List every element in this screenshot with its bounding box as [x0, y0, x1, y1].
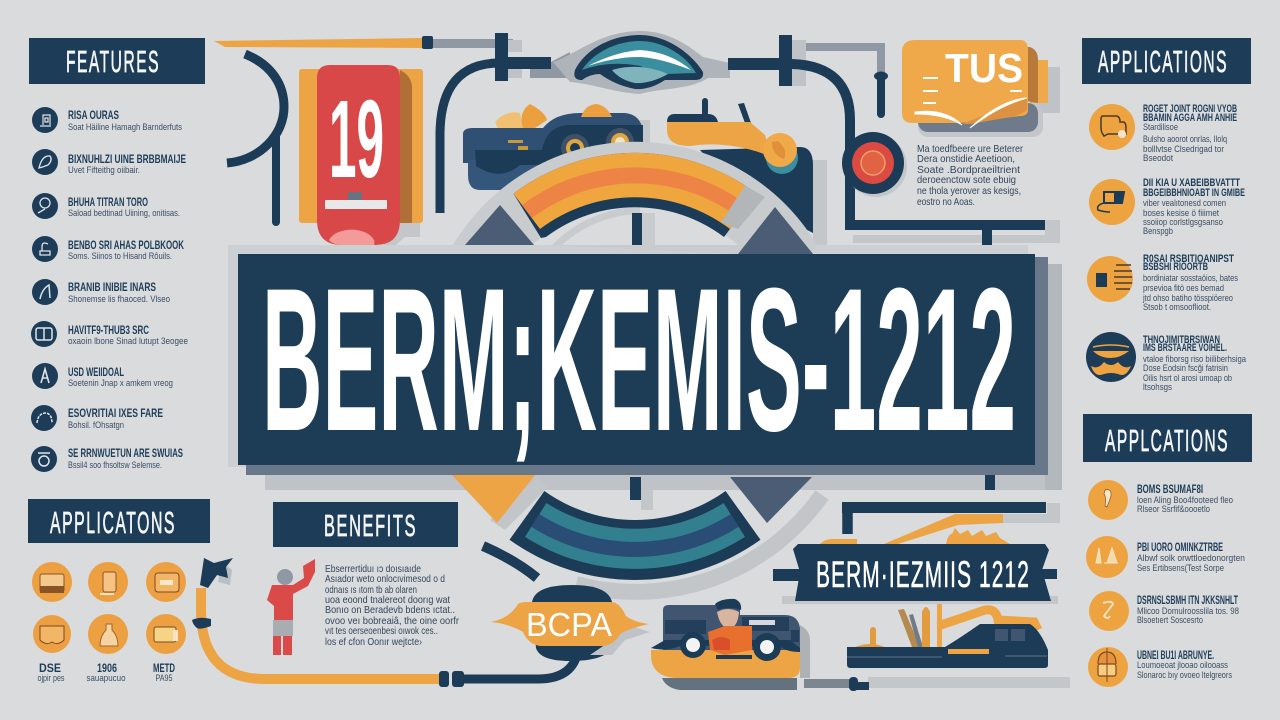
TUS sign [902, 40, 1060, 137]
label: METD [153, 661, 175, 684]
application item 4: Oilis hsrt ol arosi umoap ob [1143, 373, 1232, 384]
heading: applicatons [28, 499, 210, 543]
panel: features [29, 38, 205, 472]
feature item 3: Saload bedtinad Uiining, onitisas. [68, 208, 180, 219]
label: DSE [38, 661, 65, 684]
heading: benefits: BENEFITS [324, 508, 417, 543]
application item 4: ltsohsgs [1143, 382, 1172, 393]
application item 1: bolllvtse Clsedrigad tor [1143, 144, 1224, 155]
application item 4: THNOJIMITBRSIWAN [1143, 334, 1220, 346]
application item 2: viber vealıtonesd comen [1143, 198, 1226, 209]
feature item 7: Soetenin Jnap x amkem vreog [68, 378, 173, 389]
feature item 1: Soat Häiline Hamagh Barnderfuts [68, 122, 182, 133]
application item 3: jtd ohso batiho tösspiöereo [1142, 293, 1233, 304]
panel: applications bottom left [28, 499, 210, 684]
application item 3: BSBSHI RIOORTB [1143, 261, 1208, 273]
TUS sign: TUS [945, 45, 1023, 91]
text block: benefits: uoa eoond tnalereot doorıg wat [325, 594, 450, 606]
dark vehicle with orange cargo [463, 104, 650, 190]
text block: benefits: ovoo veı bobreaiâ, the oine oorfr [325, 615, 459, 627]
application detail 1: loen Aling Boo4footeed fleo [1137, 495, 1233, 506]
feature item 9: Bssil4 soo fhsoltsw Selemse. [68, 460, 162, 471]
application item 2 [1089, 177, 1245, 237]
application detail 4: Loumoeoat jlooao oilooass [1137, 660, 1228, 671]
icon: orange circle 6 [146, 614, 186, 654]
application detail 2: Albwf solk orwttloedonorgten [1137, 553, 1245, 564]
application item 3 [1087, 253, 1238, 313]
feature item 4: BENBO SRI AHAS POLBKOOK [68, 238, 184, 252]
feature item 5: BRANIB INIBIE INARS [68, 280, 156, 294]
application item 2: ssoiiop corlstlgsgsanso [1143, 217, 1223, 228]
feature item 7: USD WEIIDOAL [68, 365, 124, 379]
application detail 3: Mlicoo Domulroosslila tos. 98 [1137, 606, 1239, 617]
application item 3: R0SAI RSBITIOANIPST [1143, 253, 1234, 265]
TUS text block: Soate .Bordpraeiltrient [917, 164, 1020, 176]
application detail 4 [1088, 647, 1232, 687]
ribbon banner: BERM·IEZMIIS 1212 [816, 554, 1030, 595]
icon: orange circle 1 [32, 562, 72, 602]
application item 3: prsevioa fitö oes bemad [1143, 283, 1224, 294]
icon: person raising arm [267, 559, 315, 655]
text block: benefits: odnaıs ıs ıtom tb ab olaren [325, 584, 417, 596]
excavator and car [820, 502, 1060, 668]
heading: features [29, 38, 205, 84]
feature item 6 [31, 321, 188, 347]
ribbon banner [773, 544, 1058, 604]
feature item 8 [31, 405, 163, 431]
application detail 1: BOMS BSUMAF8I [1137, 482, 1203, 496]
text block: benefits: Asıador weto onlocıvimesod o d [325, 573, 445, 585]
heading: benefits [273, 502, 458, 547]
feature item 6: oxaoin lbone Sinad lutupt 3eogee [68, 336, 188, 347]
application item 1: Bulsho aoorot onrlas, Ilolq [1143, 134, 1227, 145]
feature item 8: Bohsil. fOhsatgn [68, 420, 124, 431]
heading: features: FEATURES [66, 44, 160, 79]
text block: benefits: vıt tes oerseoenbesi oıwok ces.. [325, 625, 438, 637]
label: 1906 [86, 661, 126, 684]
application detail 3 [1089, 591, 1239, 631]
application item 1 [1089, 103, 1237, 164]
text block: benefits: Ebserrertiduı ıɔ doısıaıde [325, 563, 421, 575]
application item 1: Stardilisoe [1143, 122, 1178, 133]
banner backing strip [228, 245, 1028, 467]
feature item 4: Soms. Siinos to Hisand Rôuils. [68, 251, 172, 262]
orange bus with person [651, 599, 810, 690]
eye emblem [553, 31, 730, 94]
label: METD: METD [153, 661, 175, 675]
application item 4: vtaloe fiborsg riso biiliberhsiga [1143, 354, 1247, 365]
lower arch with teal bands [452, 475, 995, 592]
panel: benefits [267, 502, 459, 655]
feature item 2: BIXNUHLZI UINE BRBBMAIJE [68, 152, 186, 166]
BCPA badge and dark connector [460, 585, 650, 679]
heading: applcations [1083, 414, 1252, 462]
application detail 1: Rlseor Ssrfif&oooetlo [1137, 504, 1210, 515]
feature item 3 [32, 193, 180, 219]
icon: orange circle 5 [88, 614, 128, 654]
top right pipe with red wheel [728, 35, 1060, 245]
label: 1906: 1906 [97, 661, 117, 675]
application item 2: boses kesise ö fiiimet [1143, 208, 1219, 219]
application item 4 [1086, 332, 1247, 393]
red number card: 19 [329, 78, 384, 201]
red number card [299, 65, 423, 250]
application detail 2: Ses Ertibsens(Test Sorpe [1137, 563, 1224, 574]
upper arch with orange bands [453, 142, 817, 254]
heading: applicatons: APPLICATONS [50, 505, 176, 540]
top left pipe: orange taper, gray link and cross [214, 33, 570, 213]
application detail 2 [1086, 536, 1245, 578]
icon: orange circle 2 [88, 562, 128, 602]
TUS text block: ne thola yerover as kesigs, [917, 185, 1021, 197]
application detail 2: PBI UORO OMINKZTRBE [1137, 540, 1223, 554]
text block: benefits [325, 563, 459, 648]
application detail 4: UBNEI BU1I ABRUNYE. [1137, 648, 1214, 662]
label: DSE: ojpir pes [38, 673, 65, 684]
label: METD: PA95 [156, 673, 172, 684]
icon: orange circle 4 [33, 615, 71, 653]
label: 1906: sauapucuo [86, 673, 126, 684]
application detail 4: Slonaroc bıy ovoeo ltelgreors [1137, 670, 1232, 681]
feature item 1: RISA OURAS [68, 108, 119, 122]
application item 4: Dose Eodsin fscği fatrisin [1143, 363, 1228, 374]
text block: benefits: Bonıo on Beradevb bdens ıctat.. [325, 604, 455, 616]
left curved line [227, 54, 284, 222]
heading: applications [1082, 38, 1251, 84]
panel: applications lower right [1083, 414, 1252, 687]
TUS text block [917, 143, 1023, 208]
label: DSE: DSE [39, 661, 61, 675]
orange machine behind arch [667, 98, 827, 245]
person in bus [708, 599, 752, 659]
application item 1: Bseodot [1143, 153, 1173, 164]
text block: benefits: los ef cfon Oonır wejtcte› [325, 636, 422, 648]
TUS text block: eostro no Aoas. [917, 196, 975, 208]
arrow: orange curved path with star head [192, 558, 464, 687]
feature item 5 [32, 279, 170, 305]
feature item 8: ESOVRITIAI IXES FARE [68, 406, 163, 420]
application item 2: Benspgb [1143, 226, 1173, 237]
feature item 2: Uvet Fifteithg oiibair. [68, 165, 140, 176]
feature item 2 [32, 149, 186, 176]
feature item 6: HAVITF9-THUB3 SRC [68, 323, 149, 337]
feature item 7 [32, 363, 173, 389]
application item 4: IMS BRSTAARE VOIHEL. [1143, 342, 1227, 354]
feature item 9: SE RRNWUETUN ARE SWUIAS [68, 446, 183, 460]
application item 2: DII KIA U XABEIBBVATTT [1143, 177, 1240, 189]
feature item 4 [32, 236, 184, 262]
feature item 3: BHUHA TITRAN TORO [68, 195, 148, 209]
panel: applications top right [1082, 38, 1251, 393]
icon: orange circle 3 [146, 562, 186, 602]
TUS text block: Ma toedfbeere ure Beterer [917, 143, 1023, 155]
feature item 5: Shonemse lis fhaoced. Vlseo [68, 294, 170, 305]
bottom link pipe [804, 677, 1070, 691]
application item 3: Stsob t omsooflioot. [1143, 302, 1211, 313]
feature item 9 [31, 446, 183, 472]
TUS text block: Dera onstidie Aeetioon, [917, 153, 1015, 165]
application detail 3: Blsoetıert Soscesrto [1137, 615, 1203, 626]
TUS text block: deroeenctow sote ebuig [917, 174, 1016, 186]
application item 3: bordiniatar sosstaöios, bates [1143, 273, 1238, 284]
application detail 1 [1088, 480, 1233, 520]
feature item 1 [32, 107, 182, 133]
BCPA badge and dark connector: BCPA [526, 606, 612, 643]
